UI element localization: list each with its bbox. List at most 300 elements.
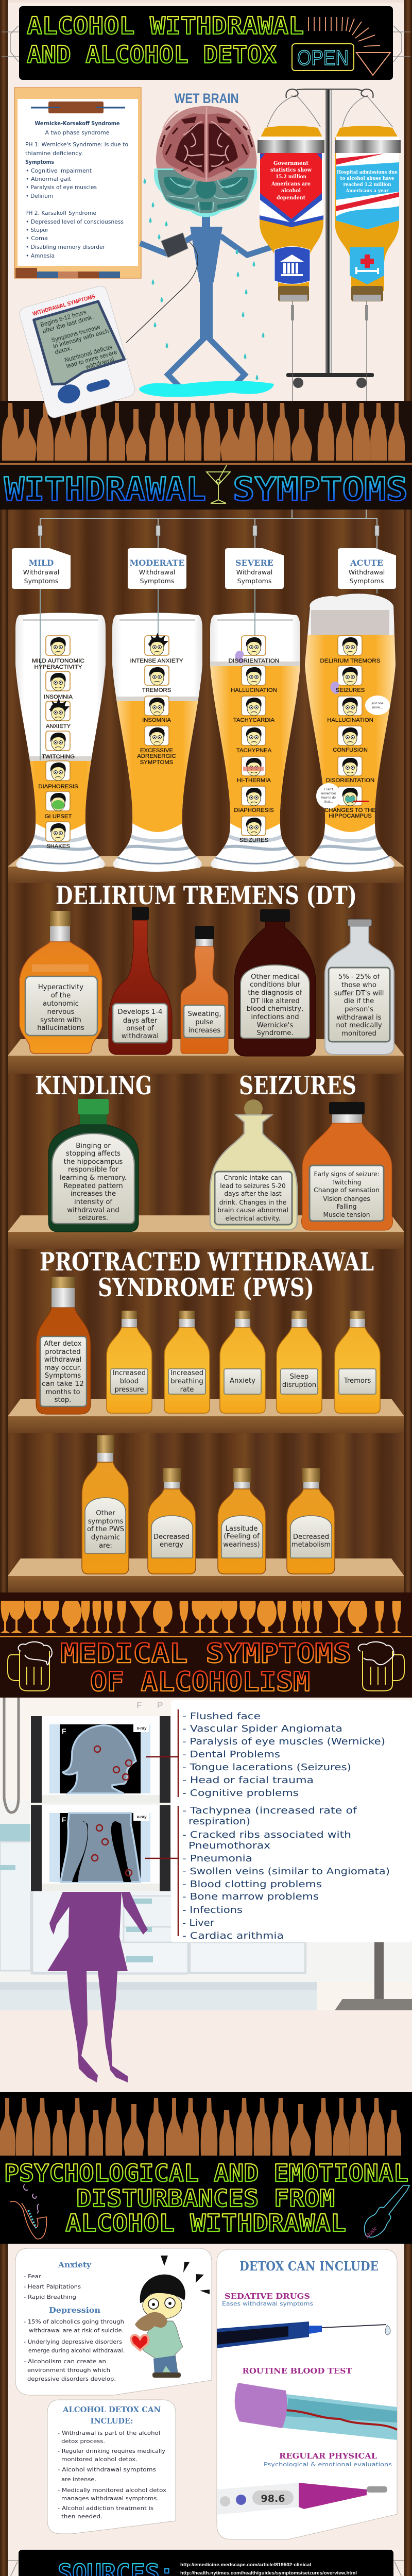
- IV stand: [267, 89, 392, 401]
- paper: [18, 99, 138, 266]
- bottle: other symptoms of PWS: of the PWS: [87, 1526, 124, 1533]
- bottle: decreased energy: [148, 1468, 196, 1574]
- icon: hospital cross label: [350, 247, 384, 284]
- regular physical: Psychological & emotional evaluations: [264, 2461, 392, 2468]
- bottle: kindling: [48, 1099, 139, 1232]
- brain red upper: [156, 106, 256, 182]
- bottle: other medical conditions: [234, 909, 316, 1056]
- x-ray labels: F: [62, 1727, 66, 1735]
- bottle: tremors: Tremors: [344, 1377, 371, 1385]
- sign hanging wires: [2, 26, 410, 62]
- bottle: kindling: Repeated pattern: [63, 1182, 123, 1190]
- IV tubing to symptom cards: [38, 510, 379, 549]
- torso silhouette: [61, 1813, 140, 1882]
- bottle: after detox: may occur.: [44, 1364, 81, 1372]
- x-ray: head: [30, 1716, 170, 1803]
- band: goblet silhouettes: [0, 1592, 412, 1639]
- list: body symptoms: - Cardiac arithmia: [182, 1930, 284, 1941]
- x-ray: torso: [30, 1805, 170, 1891]
- icon: neon martini glass: [207, 465, 230, 503]
- column: mild symptoms: [12, 548, 106, 872]
- bottle: early signs of seizure: Twitching: [332, 1179, 361, 1186]
- device: blood pressure monitor: [18, 284, 136, 419]
- bottle: sleep disruption: Sleep: [290, 1373, 308, 1381]
- sedative drugs: Eases withdrawal symptoms: [222, 2300, 313, 2307]
- card: severe: Withdrawal: [236, 568, 272, 576]
- stats text: 15.2 million: [276, 174, 306, 180]
- eye chart letters: [136, 1700, 163, 1710]
- x-ray labels: x-ray: [136, 1726, 147, 1731]
- sedative drugs: SEDATIVE DRUGS: [225, 2292, 310, 2301]
- speech bubble: just one more: just one: [371, 702, 384, 705]
- bottle: five to twenty-five percent: [325, 919, 394, 1055]
- bottle: kindling: seizures.: [78, 1214, 108, 1222]
- list: head symptoms: - Dental Problems: [182, 1749, 280, 1760]
- x-ray labels: x-ray: [136, 1815, 147, 1819]
- bottle: after detox: Symptoms: [45, 1372, 81, 1380]
- monitor screen text: withdrawal.: [84, 355, 116, 371]
- symptom labels: DIAPHORESIS: [38, 784, 78, 790]
- stats text: dependent: [277, 195, 305, 201]
- list: body symptoms: [182, 1805, 390, 1941]
- bottle: other medical conditions: DT like altered: [250, 997, 300, 1005]
- icon: worried cartoon man: [131, 2256, 210, 2378]
- clipboard text: thiamine deficiency.: [25, 150, 83, 157]
- bottle cap: [351, 286, 383, 301]
- icon: thermometer: [217, 2483, 387, 2515]
- list: monitored alcohol detox.: [61, 2457, 138, 2463]
- clipboard board: [14, 88, 141, 278]
- monitor screen: [34, 299, 126, 387]
- stats text: [270, 160, 312, 201]
- bottle: after detox: months to: [45, 1388, 80, 1396]
- clipboard text: • Delirium: [26, 193, 53, 199]
- bottle: other medical conditions: infections and: [251, 1013, 299, 1021]
- anxiety heading: Anxiety: [58, 2260, 92, 2269]
- heading: [62, 2405, 161, 2426]
- speech bubble: can't remember: remember: [321, 792, 336, 795]
- bottle: kindling: withdrawal and: [67, 1207, 119, 1214]
- header text: WITHDRAWAL: [4, 470, 206, 508]
- monitor screen text: detox.: [54, 344, 73, 356]
- anxiety list: - Rapid Breathing: [24, 2295, 76, 2300]
- symptom labels: MILD AUTONOMIC: [32, 658, 84, 664]
- card: mild: Symptoms: [24, 577, 58, 585]
- bottle: kindling: the hippocampus: [64, 1158, 123, 1166]
- clipboard text: • Amnesia: [26, 253, 55, 259]
- card: acute: ACUTE: [350, 558, 383, 568]
- section header: withdrawal symptoms: [0, 465, 412, 510]
- clip: [31, 101, 125, 113]
- list: head symptoms: - Paralysis of eye muscles (Wernicke): [182, 1736, 385, 1747]
- bottle: hyperactivity: hallucinations: [37, 1024, 84, 1032]
- speech bubble: can't remember: how to do: [321, 796, 336, 800]
- brain dark folds: [175, 116, 238, 173]
- bottle: increased breathing rate: rate: [180, 1386, 194, 1394]
- symptom labels: TACHYCARDIA: [233, 717, 275, 723]
- icon: syringe: [217, 2321, 390, 2348]
- panel: lower wood side frames: [0, 2244, 412, 2576]
- depression list: environment through which: [27, 2368, 110, 2374]
- monitor body: [18, 284, 136, 419]
- icon: neon guitar: [364, 2185, 409, 2240]
- card: moderate: MODERATE: [130, 558, 185, 568]
- bottle: chronic intake: electrical activity.: [226, 1215, 280, 1222]
- band: bottle silhouettes bottom: [0, 2092, 412, 2244]
- red shield: [260, 153, 322, 219]
- monitor screen text: after the last drink.: [41, 313, 94, 335]
- hanger wires: [267, 95, 392, 127]
- brain light ridges: [163, 107, 250, 181]
- brain mid tones: [162, 113, 205, 178]
- depression list: emerge during alcohol withdrawal.: [28, 2348, 125, 2354]
- bottle: sweating: increases: [188, 1027, 220, 1035]
- bottle: develops: withdrawal: [122, 1032, 159, 1040]
- symptom labels: [32, 658, 84, 850]
- bottle: chronic intake: Chronic intake can: [224, 1174, 282, 1181]
- list: manages withdrawal symptoms.: [61, 2496, 159, 2502]
- icon: blood pressure cuff and wire: [126, 233, 198, 343]
- list: body symptoms: - Tachypnea (increased rate of: [182, 1805, 357, 1816]
- symptom labels: EXCESSIVE: [140, 748, 173, 754]
- bottle: chronic intake: brain cause abnormal: [217, 1207, 288, 1214]
- bottle: decreased energy: energy: [160, 1541, 183, 1549]
- bottle: five to twenty-five percent: suffer DT's will: [334, 990, 384, 997]
- bottle: hyperactivity: of the: [51, 992, 71, 999]
- clipboard text: PH 2. Karsakoff Syndrome: [25, 210, 96, 216]
- column: acute symptoms: [305, 548, 396, 872]
- clipboard text: • Stupor: [26, 227, 49, 233]
- bottle: five to twenty-five percent: 5% - 25% of: [338, 973, 380, 981]
- beer glass: [15, 613, 106, 872]
- symptom labels: GI UPSET: [45, 814, 72, 820]
- list: - Medically monitored alcohol detox: [58, 2488, 166, 2494]
- amber bottle body: [335, 126, 399, 291]
- red stripes and blue band: [336, 154, 384, 165]
- bottle: hyperactivity: [20, 911, 102, 1054]
- clipboard text: • Abnormal gait: [26, 176, 71, 182]
- bottle: early signs of seizure: Muscle tension: [323, 1211, 370, 1218]
- symptom labels: DISORIENTATION: [229, 658, 279, 664]
- bottle: decreased metabolism: metabolism: [291, 1541, 331, 1549]
- bottle: other symptoms of PWS: symptoms: [88, 1518, 124, 1526]
- clipboard text: • Cognitive impairment: [26, 168, 92, 174]
- monitor buttons: [56, 382, 82, 406]
- header text: [4, 2159, 408, 2237]
- list: head symptoms: - Head or facial trauma: [182, 1775, 314, 1786]
- bottle: decreased energy: Decreased: [153, 1533, 190, 1541]
- bottle: other symptoms of PWS: [82, 1435, 129, 1574]
- symptom labels: SYMPTOMS: [140, 759, 174, 766]
- symptom labels: TACHYPNEA: [236, 748, 272, 754]
- section header: psychological disturbances: [4, 2159, 409, 2240]
- card: severe: [225, 548, 284, 589]
- heading: INCLUDE:: [91, 2416, 133, 2426]
- bottle: after detox: withdrawal: [44, 1356, 81, 1364]
- neon rays and arrow: [308, 17, 390, 75]
- silver band: [258, 140, 324, 153]
- source links: http://emedicine.medscape.com/article/819502-clinical: [180, 2562, 311, 2567]
- bottle: increased breathing rate: Increased: [170, 1369, 203, 1377]
- bottle: kindling: intensity of: [74, 1198, 112, 1206]
- list: head symptoms: - Vascular Spider Angiomata: [182, 1723, 342, 1734]
- list: detox process.: [61, 2439, 105, 2445]
- symptom labels: CHANGES TO THE: [324, 807, 376, 814]
- header text: MEDICAL SYMPTOMS: [60, 1638, 351, 1669]
- speech bubble: can't remember: [316, 783, 341, 809]
- list: body symptoms: - Cracked ribs associated with: [182, 1829, 351, 1840]
- band: bottle silhouettes: [0, 401, 412, 465]
- list: body symptoms: - Liver: [182, 1918, 215, 1928]
- bottle: decreased metabolism: Decreased: [293, 1533, 329, 1541]
- bottle: early signs of seizure: Early signs of seizure:: [314, 1171, 379, 1178]
- bottle: kindling: learning & memory.: [60, 1174, 127, 1182]
- bottle: other symptoms of PWS: are:: [99, 1542, 112, 1550]
- clipboard text: • Disabling memory disorder: [26, 244, 106, 250]
- sedative drugs: [222, 2292, 313, 2307]
- bottle: develops: Develops 1-4: [118, 1008, 162, 1016]
- header text: SYMPTOMS: [233, 470, 408, 508]
- symptom labels: HI-THERMIA: [237, 777, 271, 784]
- bottle: develops: onset of: [126, 1025, 154, 1032]
- clipboard text: • Coma: [26, 235, 48, 242]
- bottle: other medical conditions: Other medical: [251, 973, 299, 981]
- clipboard text: Symptoms: [25, 159, 54, 165]
- heading: protracted withdrawal syndrome: [40, 1247, 374, 1302]
- x-ray labels: [62, 1724, 149, 1735]
- symptom labels: CONFUSION: [333, 747, 368, 753]
- bottle: after detox: [36, 1277, 91, 1414]
- symptom labels: INSOMNIA: [44, 694, 73, 700]
- clipboard text: Wernicke-Korsakoff Syndrome: [35, 121, 119, 127]
- anxiety list: - Fear: [24, 2274, 42, 2280]
- brain lower lobes: [158, 170, 254, 213]
- symptom labels: DISORIENTATION: [326, 777, 374, 784]
- bottle: sleep disruption: [277, 1311, 322, 1413]
- speech bubble: just one more: [365, 696, 390, 715]
- bottle: develops: days after: [123, 1017, 158, 1025]
- source links: http://health.nytimes.com/health/guides/symptoms/seizures/overview.html: [180, 2570, 357, 2575]
- monitor screen text: Begins 6-12 hours: [40, 309, 87, 328]
- list: then needed.: [61, 2514, 102, 2520]
- bottle: increased blood pressure: [107, 1311, 152, 1413]
- regular physical: [264, 2451, 392, 2468]
- list: are intense.: [61, 2477, 96, 2483]
- shelves: [8, 856, 404, 1592]
- list: body symptoms: - Swollen veins (similar to Angiomata): [182, 1866, 390, 1877]
- heading: ALCOHOL DETOX CAN: [62, 2405, 161, 2414]
- pole: [325, 90, 332, 374]
- header text: [4, 470, 408, 508]
- header text: DISTURBANCES FROM: [76, 2184, 335, 2212]
- tubes: [293, 301, 367, 401]
- panel: anxiety and depression: [15, 2248, 212, 2395]
- bottle: tremors: [335, 1311, 380, 1413]
- bottle: sweating: pulse: [195, 1019, 214, 1026]
- brain illustration: [154, 106, 257, 217]
- callout brackets: [145, 1709, 178, 1936]
- monitor title: WITHDRAWAL SYMPTOMS: [32, 294, 96, 317]
- stats text: statistics show: [270, 167, 312, 173]
- x-ray labels: F: [62, 1816, 66, 1824]
- panel: alcohol detox can include: [47, 2400, 176, 2534]
- bottle: anxiety: [220, 1311, 265, 1413]
- bottle: early signs of seizure: Change of sensation: [314, 1187, 380, 1194]
- anxiety list: - Heart Palpitations: [24, 2284, 81, 2290]
- figure: woman silhouette: [47, 1892, 148, 2082]
- icon: thermometer: 98.6: [261, 2493, 285, 2504]
- bottle: lassitude: Lassitude: [226, 1525, 258, 1533]
- main label: [260, 137, 323, 227]
- bottle: after detox: stop.: [55, 1396, 71, 1404]
- bottle: other symptoms of PWS: dynamic: [91, 1534, 120, 1541]
- title text: ALCOHOL WITHDRAWAL: [27, 12, 304, 40]
- card: moderate: [128, 548, 186, 589]
- card: acute: Symptoms: [350, 577, 384, 585]
- symptom labels: DIAPHORESIS: [234, 807, 274, 814]
- clipboard text: [25, 121, 128, 259]
- bottle: increased blood pressure: pressure: [115, 1386, 144, 1394]
- icon: government building label: [274, 246, 310, 284]
- sources sign: [8, 2550, 404, 2576]
- beer glass: [112, 613, 202, 872]
- hospital stats text: to alcohol abuse have: [340, 176, 394, 181]
- title text: AND ALCOHOL DETOX: [27, 41, 277, 69]
- symptom icons: [330, 636, 369, 806]
- sign hanging wires: [8, 2561, 404, 2576]
- list: head symptoms: - Cognitive problems: [182, 1788, 299, 1799]
- card: severe: SEVERE: [235, 558, 273, 568]
- symptom labels: HYPERACTIVITY: [34, 664, 82, 670]
- symptom labels: SHAKES: [46, 843, 70, 850]
- card: mild: [12, 548, 71, 589]
- card: moderate: Withdrawal: [139, 568, 175, 576]
- card: moderate: Symptoms: [140, 577, 174, 585]
- bottle: kindling: responsible for: [68, 1166, 119, 1174]
- beer glass with foam: [305, 592, 396, 872]
- regular physical: REGULAR PHYSICAL: [279, 2451, 377, 2461]
- wood background: [0, 510, 412, 1592]
- symptom labels: INSOMNIA: [142, 717, 171, 723]
- bottle: decreased metabolism: [287, 1468, 335, 1574]
- hooks: [286, 89, 373, 98]
- depression list: [24, 2319, 125, 2382]
- symptom labels: INTENSE ANXIETY: [130, 658, 183, 664]
- sign board: [19, 6, 393, 80]
- symptom labels: HALLUCINATION: [231, 687, 277, 693]
- list: [58, 2431, 166, 2520]
- heading: protracted withdrawal syndrome: SYNDROME (PWS): [98, 1273, 314, 1302]
- bottle: develops: [109, 907, 172, 1055]
- bottle: five to twenty-five percent: person's: [345, 1006, 373, 1013]
- bottle: chronic intake: lead to seizures 5-20: [220, 1182, 286, 1190]
- bottle: increased blood pressure: Increased: [113, 1369, 146, 1377]
- stethoscope loop: [4, 1698, 19, 1812]
- title sign: [2, 6, 410, 80]
- bottle: five to twenty-five percent: die if the: [344, 997, 374, 1005]
- clipboard text: PH 1. Wernicke's Syndrome: is due to: [25, 142, 128, 148]
- depression list: - Alcoholism can create an: [24, 2359, 106, 2365]
- source links: [180, 2562, 357, 2576]
- card: mild: MILD: [29, 558, 54, 568]
- clipboard text: A two phase syndrome: [45, 130, 109, 136]
- eye chart letters: F: [136, 1700, 142, 1710]
- list: body symptoms: - Infections: [182, 1905, 243, 1916]
- card: mild: Withdrawal: [23, 568, 59, 576]
- card: acute: [338, 548, 396, 589]
- anxiety list: [24, 2274, 81, 2300]
- bottle: kindling: stopping affects: [66, 1150, 121, 1158]
- heading: kindling: KINDLING: [35, 1071, 152, 1100]
- list: - Alcohol withdrawal symptoms: [58, 2467, 156, 2473]
- x-ray labels: [62, 1813, 149, 1824]
- bottle: chronic intake: drink. Changes in the: [219, 1199, 286, 1206]
- monitor screen text: lead to more severe: [65, 348, 118, 370]
- depression heading: Depression: [49, 2306, 100, 2315]
- symptom labels: ANXIETY: [46, 723, 71, 730]
- bottle: five to twenty-five percent: withdrawal is: [336, 1014, 382, 1022]
- card: acute: Withdrawal: [349, 568, 385, 576]
- hospital stats text: Hospital admissions due: [337, 170, 398, 175]
- clipboard text: • Paralysis of eye muscles: [26, 184, 97, 191]
- panel: detox can include: [217, 2249, 397, 2539]
- bottle: sleep disruption: disruption: [282, 1381, 316, 1389]
- list: body symptoms: respiration): [188, 1816, 250, 1827]
- x-ray markers: [94, 1746, 132, 1780]
- bottle: sweating: [181, 926, 228, 1054]
- list: body symptoms: - Pneumonia: [182, 1853, 252, 1864]
- list: body symptoms: Pneumothorax: [188, 1840, 270, 1851]
- symptom labels: HALLUCINATION: [327, 717, 373, 723]
- icon: heart: [131, 2335, 148, 2350]
- bottle: five to twenty-five percent: monitored: [341, 1030, 376, 1038]
- icon: blood test tube: [235, 2383, 397, 2440]
- symptom icons: [145, 633, 169, 745]
- column: severe symptoms: [210, 548, 300, 872]
- bottle: other medical conditions: Wernicke's: [257, 1022, 293, 1029]
- bottle: five to twenty-five percent: not medically: [336, 1022, 382, 1029]
- panel: wood side frame top: [0, 0, 412, 402]
- colour tabs: [15, 268, 120, 278]
- column: moderate symptoms: [112, 548, 202, 872]
- header text: OF ALCOHOLISM: [90, 1667, 310, 1698]
- routine blood test: ROUTINE BLOOD TEST: [242, 2366, 352, 2376]
- monitor screen text: Nutritional deficits: [64, 343, 113, 364]
- bottle: other symptoms of PWS: Other: [96, 1510, 115, 1517]
- stats text: Government: [273, 160, 308, 166]
- bottle: other medical conditions: blood chemistry,: [247, 1005, 303, 1013]
- hospital stats text: reached 1.2 million: [343, 182, 391, 188]
- list: body symptoms: - Blood clotting problems: [182, 1879, 322, 1890]
- bottle: hyperactivity: system with: [40, 1016, 81, 1024]
- monitor screen text: [40, 303, 119, 379]
- bottle: lassitude: weariness): [223, 1541, 260, 1549]
- monitor screen text: Symptoms increase: [50, 323, 101, 344]
- heading: DETOX CAN INCLUDE: [239, 2259, 379, 2274]
- beer glass: [210, 613, 300, 872]
- symptom labels: [229, 658, 279, 843]
- IV bottle: government statistics: [258, 126, 324, 301]
- monitor screen text: in intensity with each: [52, 327, 110, 350]
- icon: neon saxophone: [10, 2184, 46, 2239]
- icon: neon beer mug right: [358, 1642, 404, 1691]
- bottle: sweating: Sweating,: [187, 1010, 221, 1018]
- list: head symptoms: - Tongue lacerations (Seizures): [182, 1762, 351, 1773]
- symptom labels: TWITCHING: [42, 754, 75, 760]
- symptom labels: [130, 658, 183, 766]
- header text: PSYCHOLOGICAL AND EMOTIONAL: [4, 2159, 408, 2187]
- clipboard text: • Depressed level of consciousness: [26, 219, 124, 225]
